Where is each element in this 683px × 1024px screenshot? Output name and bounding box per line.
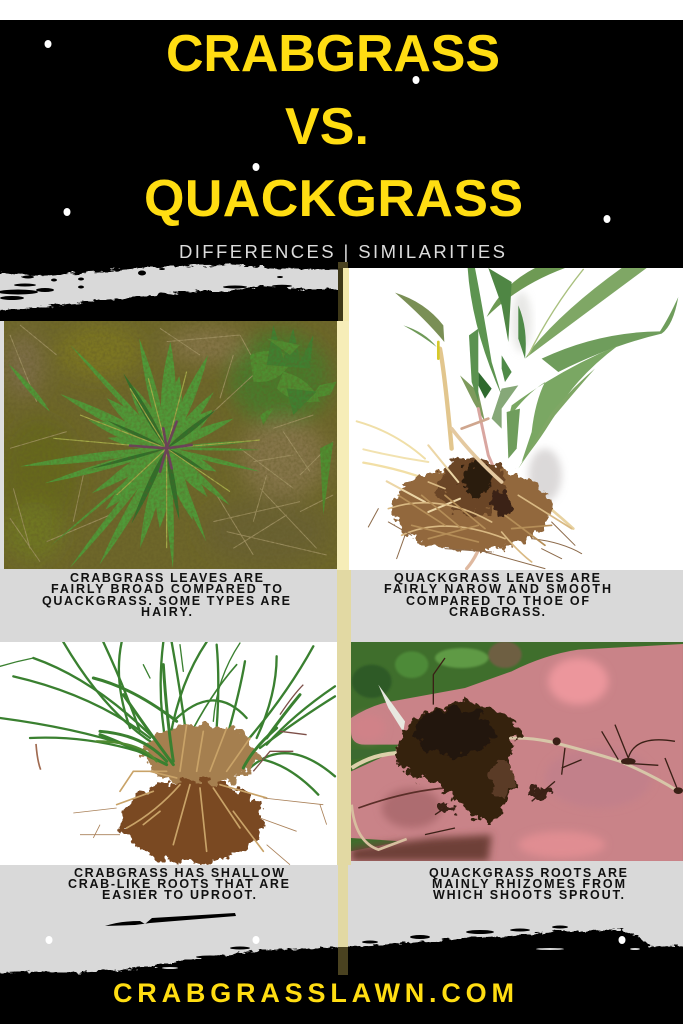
right caption panel 1 — [349, 570, 683, 642]
title: QUACKGRASS — [144, 170, 523, 228]
caption: crabgrass roots — [68, 866, 289, 902]
decorative white dots — [44, 40, 610, 223]
caption: quackgrass leaves: QUACKGRASS LEAVES ARE — [394, 571, 600, 585]
caption: crabgrass roots: CRAB-LIKE ROOTS THAT ARE — [68, 877, 289, 891]
website footer: CRABGRASSLAWN.COM — [113, 978, 514, 1008]
caption: quackgrass roots: WHICH SHOOTS SPROUT. — [433, 888, 624, 902]
photo: quackgrass roots on hand — [351, 641, 683, 861]
light marks in black edge — [162, 948, 640, 969]
top white strip — [0, 0, 683, 20]
caption: crabgrass leaves: FAIRLY BROAD COMPARED TO — [51, 582, 282, 596]
photo edge strip — [0, 321, 4, 569]
photo: quackgrass plant with roots — [349, 268, 683, 570]
bottom white dots — [46, 936, 626, 944]
caption: crabgrass leaves: QUACKGRASS. SOME TYPES ARE — [42, 594, 290, 608]
bottom rough black edge — [0, 930, 683, 985]
caption: quackgrass leaves — [384, 571, 611, 619]
title — [144, 25, 523, 228]
caption: quackgrass leaves: CRABGRASS. — [449, 605, 545, 619]
photo: crabgrass clump with roots — [0, 642, 337, 865]
caption: quackgrass roots: QUACKGRASS ROOTS ARE — [429, 866, 627, 880]
title: CRABGRASS — [166, 25, 500, 83]
vertical divider beam — [337, 262, 351, 975]
caption: quackgrass leaves: COMPARED TO THOE OF — [406, 594, 589, 608]
caption: crabgrass leaves — [42, 571, 290, 619]
caption: crabgrass leaves: CRABGRASS LEAVES ARE — [70, 571, 263, 585]
caption: crabgrass roots: EASIER TO UPROOT. — [102, 888, 256, 902]
caption: crabgrass roots: CRABGRASS HAS SHALLOW — [74, 866, 284, 880]
title: VS. — [285, 98, 369, 156]
brush marks in grey panel — [105, 913, 568, 958]
caption: quackgrass leaves: FAIRLY NAROW AND SMOOTH — [384, 582, 611, 596]
photo: crabgrass leaves from above — [0, 321, 337, 570]
caption: quackgrass roots: MAINLY RHIZOMES FROM — [432, 877, 625, 891]
caption: quackgrass roots — [429, 866, 627, 902]
top grey brush stroke — [0, 265, 345, 311]
subtitle: DIFFERENCES | SIMILARITIES — [179, 241, 505, 262]
bottom grey brush panel — [0, 861, 683, 980]
caption: crabgrass leaves: HAIRY. — [141, 605, 192, 619]
left caption panel 1 — [0, 569, 337, 642]
